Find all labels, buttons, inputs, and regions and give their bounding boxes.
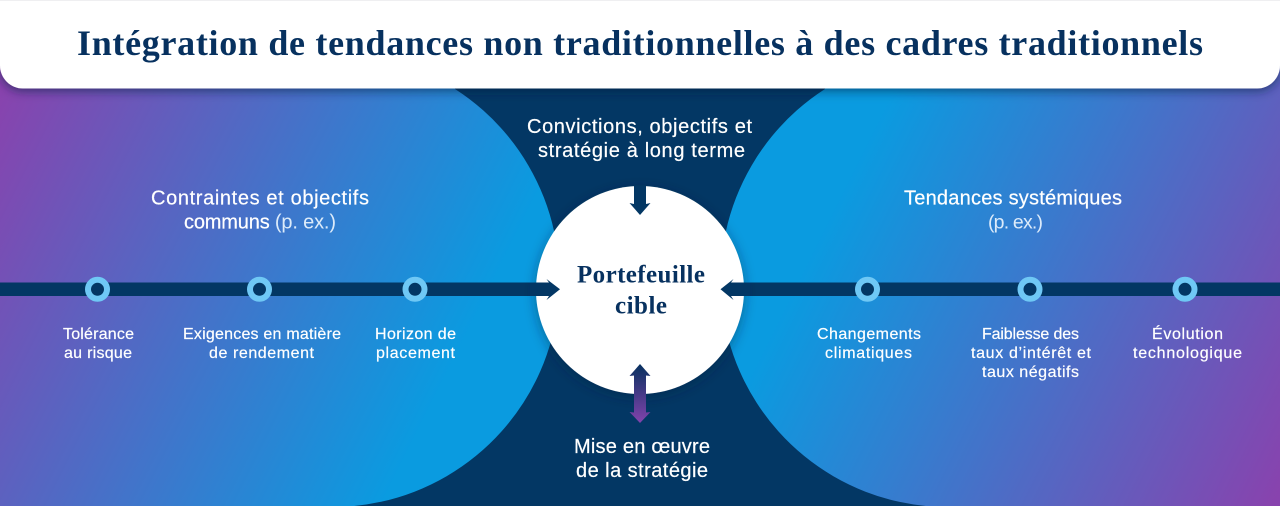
node: exigences de rendement: de rendement xyxy=(209,345,315,362)
node: faiblesse des taux: taux d’intérêt et xyxy=(971,345,1092,362)
heading: mise en œuvre xyxy=(574,436,710,482)
heading: contraintes et objectifs: Contraintes et objectifs xyxy=(151,188,369,210)
heading: (p. ex.): (p. ex.) xyxy=(988,212,1043,234)
node: exigences de rendement: Exigences en matière xyxy=(183,326,341,343)
node: tolérance au risque xyxy=(63,280,134,362)
title banner xyxy=(0,0,1280,88)
panel: tendances systémiques xyxy=(721,60,1280,506)
arrow: right into centre xyxy=(720,279,750,300)
node: évolution technologique: technologique xyxy=(1133,345,1242,362)
left timeline bar xyxy=(0,282,546,296)
heading: tendances systémiques: Tendances systémiques xyxy=(904,188,1122,210)
node: horizon de placement xyxy=(375,280,456,362)
heading: mise en œuvre: Mise en œuvre xyxy=(574,436,710,458)
node: horizon de placement: Horizon de xyxy=(375,326,456,343)
right timeline bar xyxy=(734,282,1280,296)
panel: contraintes et objectifs communs xyxy=(0,60,559,506)
node: horizon de placement: placement xyxy=(376,345,456,362)
label: portefeuille: Portefeuille xyxy=(577,262,705,288)
heading: communs (p. ex.): communs (p. ex.) xyxy=(184,212,336,234)
node: changements climatiques xyxy=(817,280,921,362)
arrow: top into centre xyxy=(630,186,650,215)
node: évolution technologique: Évolution xyxy=(1152,324,1223,343)
node: faiblesse des taux xyxy=(971,280,1092,381)
arrow: bottom double-headed xyxy=(630,364,650,423)
node: changements climatiques: Changements xyxy=(817,326,921,343)
centre circle: portefeuille cible xyxy=(536,186,744,394)
node: tolérance au risque: Tolérance xyxy=(63,326,134,343)
node: tolérance au risque: au risque xyxy=(64,345,132,362)
title: Intégration de tendances non traditionnelles à des cadres traditionnels xyxy=(77,23,1203,63)
node: évolution technologique xyxy=(1133,280,1242,362)
label: cible: cible xyxy=(615,292,667,320)
heading: mise en œuvre: de la stratégie xyxy=(576,460,708,482)
node: faiblesse des taux: taux négatifs xyxy=(982,364,1079,381)
arrow: left into centre xyxy=(530,279,560,300)
node: faiblesse des taux: Faiblesse des xyxy=(982,326,1079,343)
node: exigences de rendement xyxy=(183,280,341,362)
heading: convictions xyxy=(527,116,752,162)
node: changements climatiques: climatiques xyxy=(825,345,912,362)
heading: convictions: stratégie à long terme xyxy=(538,140,745,162)
heading: convictions: Convictions, objectifs et xyxy=(527,116,752,138)
